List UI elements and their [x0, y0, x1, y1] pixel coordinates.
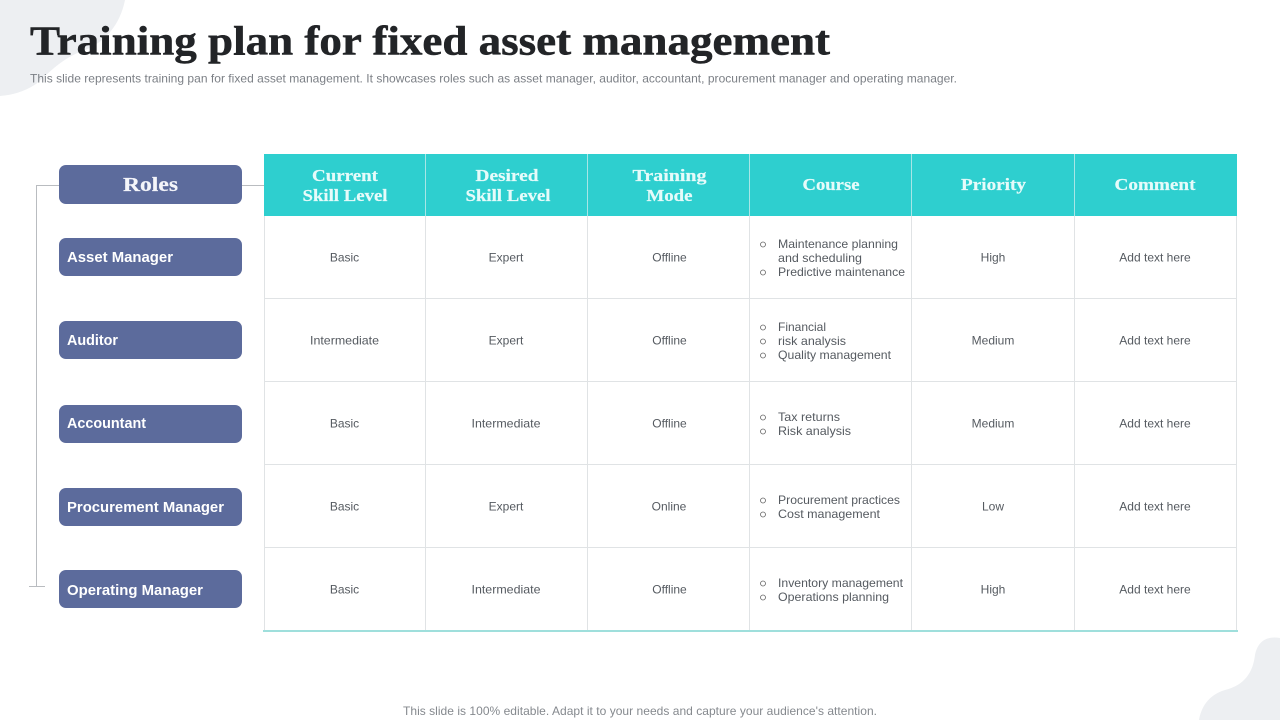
row: Operating Manager: Basic [330, 582, 359, 596]
table header row: Comment [1114, 175, 1196, 194]
role: Procurement Manager: Procurement Manager [67, 499, 224, 516]
table [263, 154, 1238, 631]
decorative blob: bottom right [1199, 638, 1280, 720]
row: Procurement Manager: Expert [489, 500, 524, 514]
role: Accountant [59, 405, 242, 443]
row: Auditor: Expert [489, 334, 524, 348]
row: Procurement Manager: Online [652, 500, 687, 514]
connector: roles bracket [29, 186, 264, 586]
row: Procurement Manager: Low [982, 500, 1004, 514]
role: Asset Manager: Asset Manager [67, 249, 173, 266]
row: Asset Manager: Expert [489, 250, 524, 264]
row: Procurement Manager: Add text here [1119, 500, 1191, 514]
row: Asset Manager: Add text here [1119, 250, 1191, 264]
panel: roles column [59, 165, 242, 608]
table grid [264, 216, 1237, 631]
row: Accountant: Basic [330, 416, 359, 430]
row: Auditor: risk analysis [778, 334, 846, 348]
row: Asset Manager: Offline [652, 250, 687, 264]
table header row: Current [312, 166, 378, 185]
row: Accountant: Intermediate [472, 416, 541, 430]
row: Operating Manager: Offline [652, 582, 687, 596]
table header row: Mode [646, 186, 693, 205]
decorative blob: top left [0, 0, 125, 96]
role: Procurement Manager [59, 488, 242, 526]
role: Accountant: Accountant [67, 415, 146, 432]
role: Operating Manager [59, 570, 242, 608]
row: Accountant: Medium [972, 416, 1014, 430]
row: Asset Manager: High [981, 250, 1005, 264]
row: Asset Manager: Predictive maintenance [778, 265, 905, 279]
row: Auditor: Quality management [778, 348, 892, 362]
role: Operating Manager: Operating Manager [67, 582, 203, 599]
row: Asset Manager: Basic [330, 250, 359, 264]
table header row: Training [632, 166, 707, 185]
row: Operating Manager: Intermediate [472, 582, 541, 596]
row: Accountant [330, 410, 1191, 438]
row: Asset Manager [330, 237, 1191, 279]
row: Auditor: Financial [778, 320, 826, 334]
row: Procurement Manager: Cost management [778, 507, 881, 521]
role heading: Roles [59, 165, 242, 204]
table header row: Skill Level [302, 186, 388, 205]
table header row: Priority [961, 175, 1027, 194]
row: Operating Manager: Operations planning [778, 590, 889, 604]
row: Accountant: Tax returns [778, 410, 840, 424]
row: Procurement Manager: Procurement practices [778, 493, 900, 507]
row: Procurement Manager [330, 493, 1191, 521]
role: Auditor [59, 321, 242, 359]
table header row: Desired [476, 166, 539, 185]
title: Training plan for fixed asset management [30, 18, 830, 64]
table header row [264, 154, 1237, 216]
row: Accountant: Offline [652, 416, 687, 430]
row: Operating Manager: Add text here [1119, 582, 1191, 596]
row: Accountant: Add text here [1119, 416, 1191, 430]
footer note: This slide is 100% editable. Adapt it to your needs and capture your audience's attention. [403, 704, 877, 718]
row: Auditor [310, 320, 1191, 362]
row: Auditor: Medium [972, 334, 1014, 348]
table header row: Skill Level [466, 186, 551, 205]
role: Auditor: Auditor [67, 332, 118, 349]
row: Procurement Manager: Basic [330, 500, 359, 514]
row: Auditor: Intermediate [310, 334, 379, 348]
row: Auditor: Add text here [1119, 334, 1191, 348]
row: Asset Manager: and scheduling [778, 251, 862, 265]
row: Operating Manager: Inventory management [778, 576, 904, 590]
role heading: Roles: Roles [123, 174, 178, 196]
subtitle: This slide represents training pan for fixed asset management. It showcases roles such as asset manager, auditor, accountant, procurement manager and operating manager. [30, 72, 957, 86]
role: Asset Manager [59, 238, 242, 276]
table bottom rule [263, 630, 1238, 632]
row: Accountant: Risk analysis [778, 424, 851, 438]
table header row: Course [802, 175, 860, 194]
row: Asset Manager: Maintenance planning [778, 237, 898, 251]
row: Auditor: Offline [652, 334, 687, 348]
row: Operating Manager: High [981, 582, 1005, 596]
row: Operating Manager [330, 576, 1191, 604]
